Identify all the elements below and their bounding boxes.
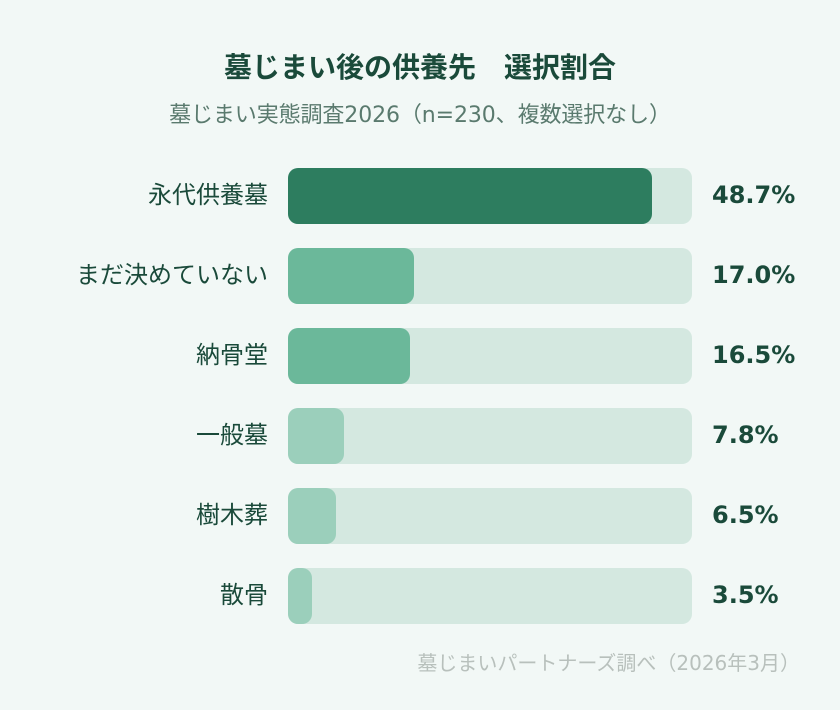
subtitle: 墓じまい実態調査2026（n=230、複数選択なし）: [169, 103, 671, 128]
row: 散骨: 3.5%: [712, 581, 779, 609]
row: 一般墓: [196, 408, 779, 464]
row: 納骨堂: 16.5%: [712, 341, 795, 369]
row: まだ決めていない: まだ決めていない: [76, 261, 268, 289]
row: 散骨: 散骨: [220, 581, 268, 609]
row: 一般墓: 一般墓: [196, 421, 268, 449]
row: 永代供養墓: [148, 168, 795, 224]
row: 樹木葬: 樹木葬: [196, 501, 268, 529]
row: 永代供養墓: 48.7%: [712, 181, 795, 209]
row: まだ決めていない: [76, 248, 795, 304]
source note: 墓じまいパートナーズ調べ（2026年3月）: [417, 651, 800, 675]
row: 納骨堂: [196, 328, 795, 384]
bar chart: [76, 168, 795, 624]
row: 樹木葬: [196, 488, 779, 544]
row: 樹木葬: 6.5%: [712, 501, 779, 529]
row: 一般墓: 7.8%: [712, 421, 779, 449]
title: 墓じまい後の供養先 選択割合: [224, 51, 616, 84]
row: 散骨: [220, 568, 779, 624]
row: 納骨堂: 納骨堂: [196, 341, 268, 369]
row: まだ決めていない: 17.0%: [712, 261, 795, 289]
row: 永代供養墓: 永代供養墓: [148, 181, 268, 209]
